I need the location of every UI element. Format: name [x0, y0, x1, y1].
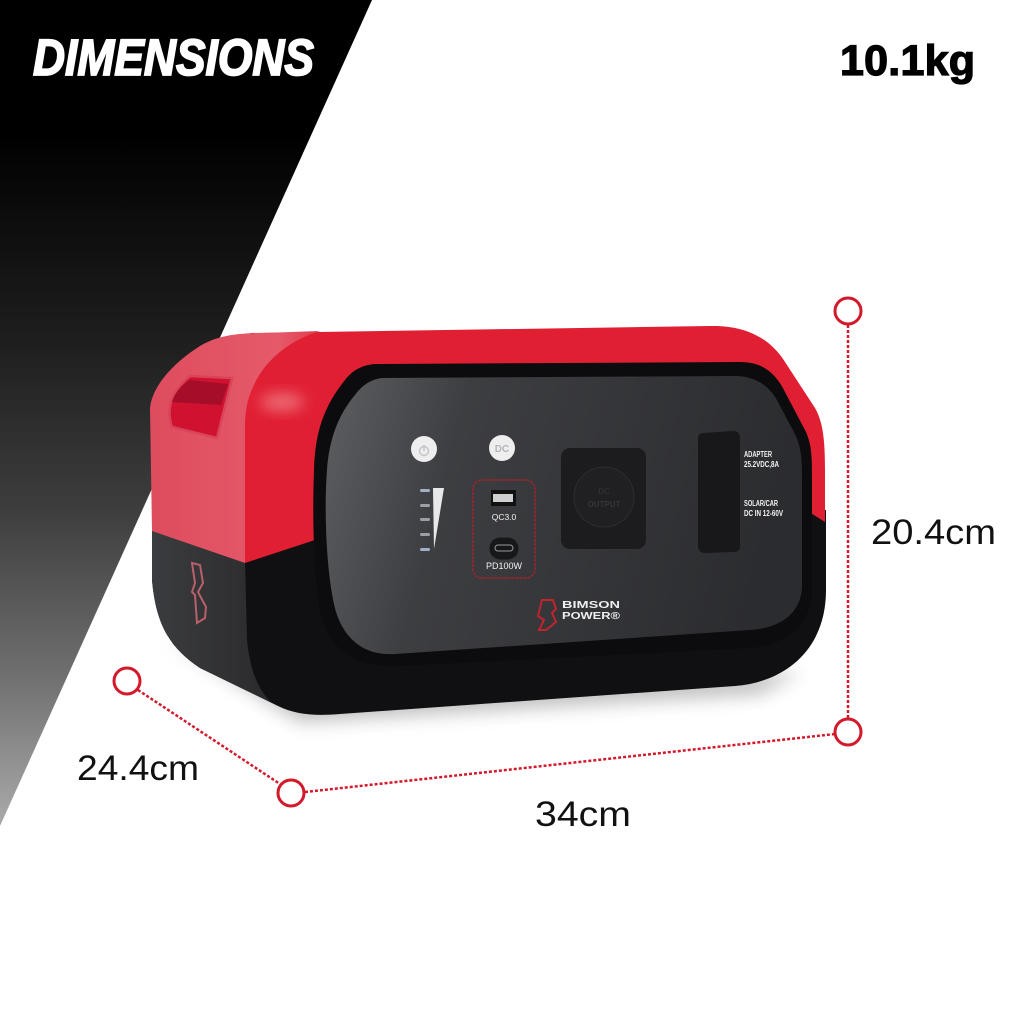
lower side face [152, 530, 272, 703]
USB port group: QC3.0 [492, 512, 517, 522]
depth label: 24.4cm [77, 749, 199, 788]
red upper front shell [240, 326, 825, 563]
DC button: DC [495, 444, 509, 455]
brand logo [538, 599, 620, 630]
adapter label [744, 450, 779, 469]
title: DIMENSIONS [33, 29, 314, 86]
product: portable power station [150, 326, 826, 722]
DC button [489, 435, 515, 461]
logo mark on side [192, 563, 206, 623]
solar and car label: DC IN 12-60V [744, 509, 784, 518]
DC output rubber cover: OUTPUT [588, 500, 621, 509]
width label: 34cm [535, 795, 631, 834]
adapter label: ADAPTER [744, 450, 772, 459]
power button [411, 436, 437, 462]
solar and car label: SOLAR/CAR [744, 499, 778, 508]
brand logo: POWER® [562, 610, 620, 622]
DC output rubber cover: DC [598, 487, 610, 496]
depth dimension line [114, 668, 280, 784]
width dimension line [278, 734, 835, 806]
red upper side face [150, 331, 320, 563]
brand logo: BIMSON [562, 599, 620, 611]
highlight on the corner [260, 393, 304, 411]
front panel [326, 376, 802, 654]
USB port group [473, 480, 535, 578]
USB port group: PD100W [486, 561, 523, 571]
DC output rubber cover [561, 448, 646, 549]
ground shadow [170, 640, 800, 722]
adapter label: 25.2VDC,8A [744, 460, 779, 469]
height label: 20.4cm [871, 513, 996, 552]
input port rubber cover [698, 431, 740, 553]
front black gasket [313, 362, 812, 666]
background: diagonal black-to-grey panel [0, 0, 372, 826]
battery level indicator [420, 488, 444, 551]
weight label: 10.1kg [840, 37, 975, 85]
side handle [169, 376, 232, 438]
height dimension line [835, 298, 861, 745]
lower black body [152, 510, 826, 715]
solar and car label [744, 499, 784, 518]
